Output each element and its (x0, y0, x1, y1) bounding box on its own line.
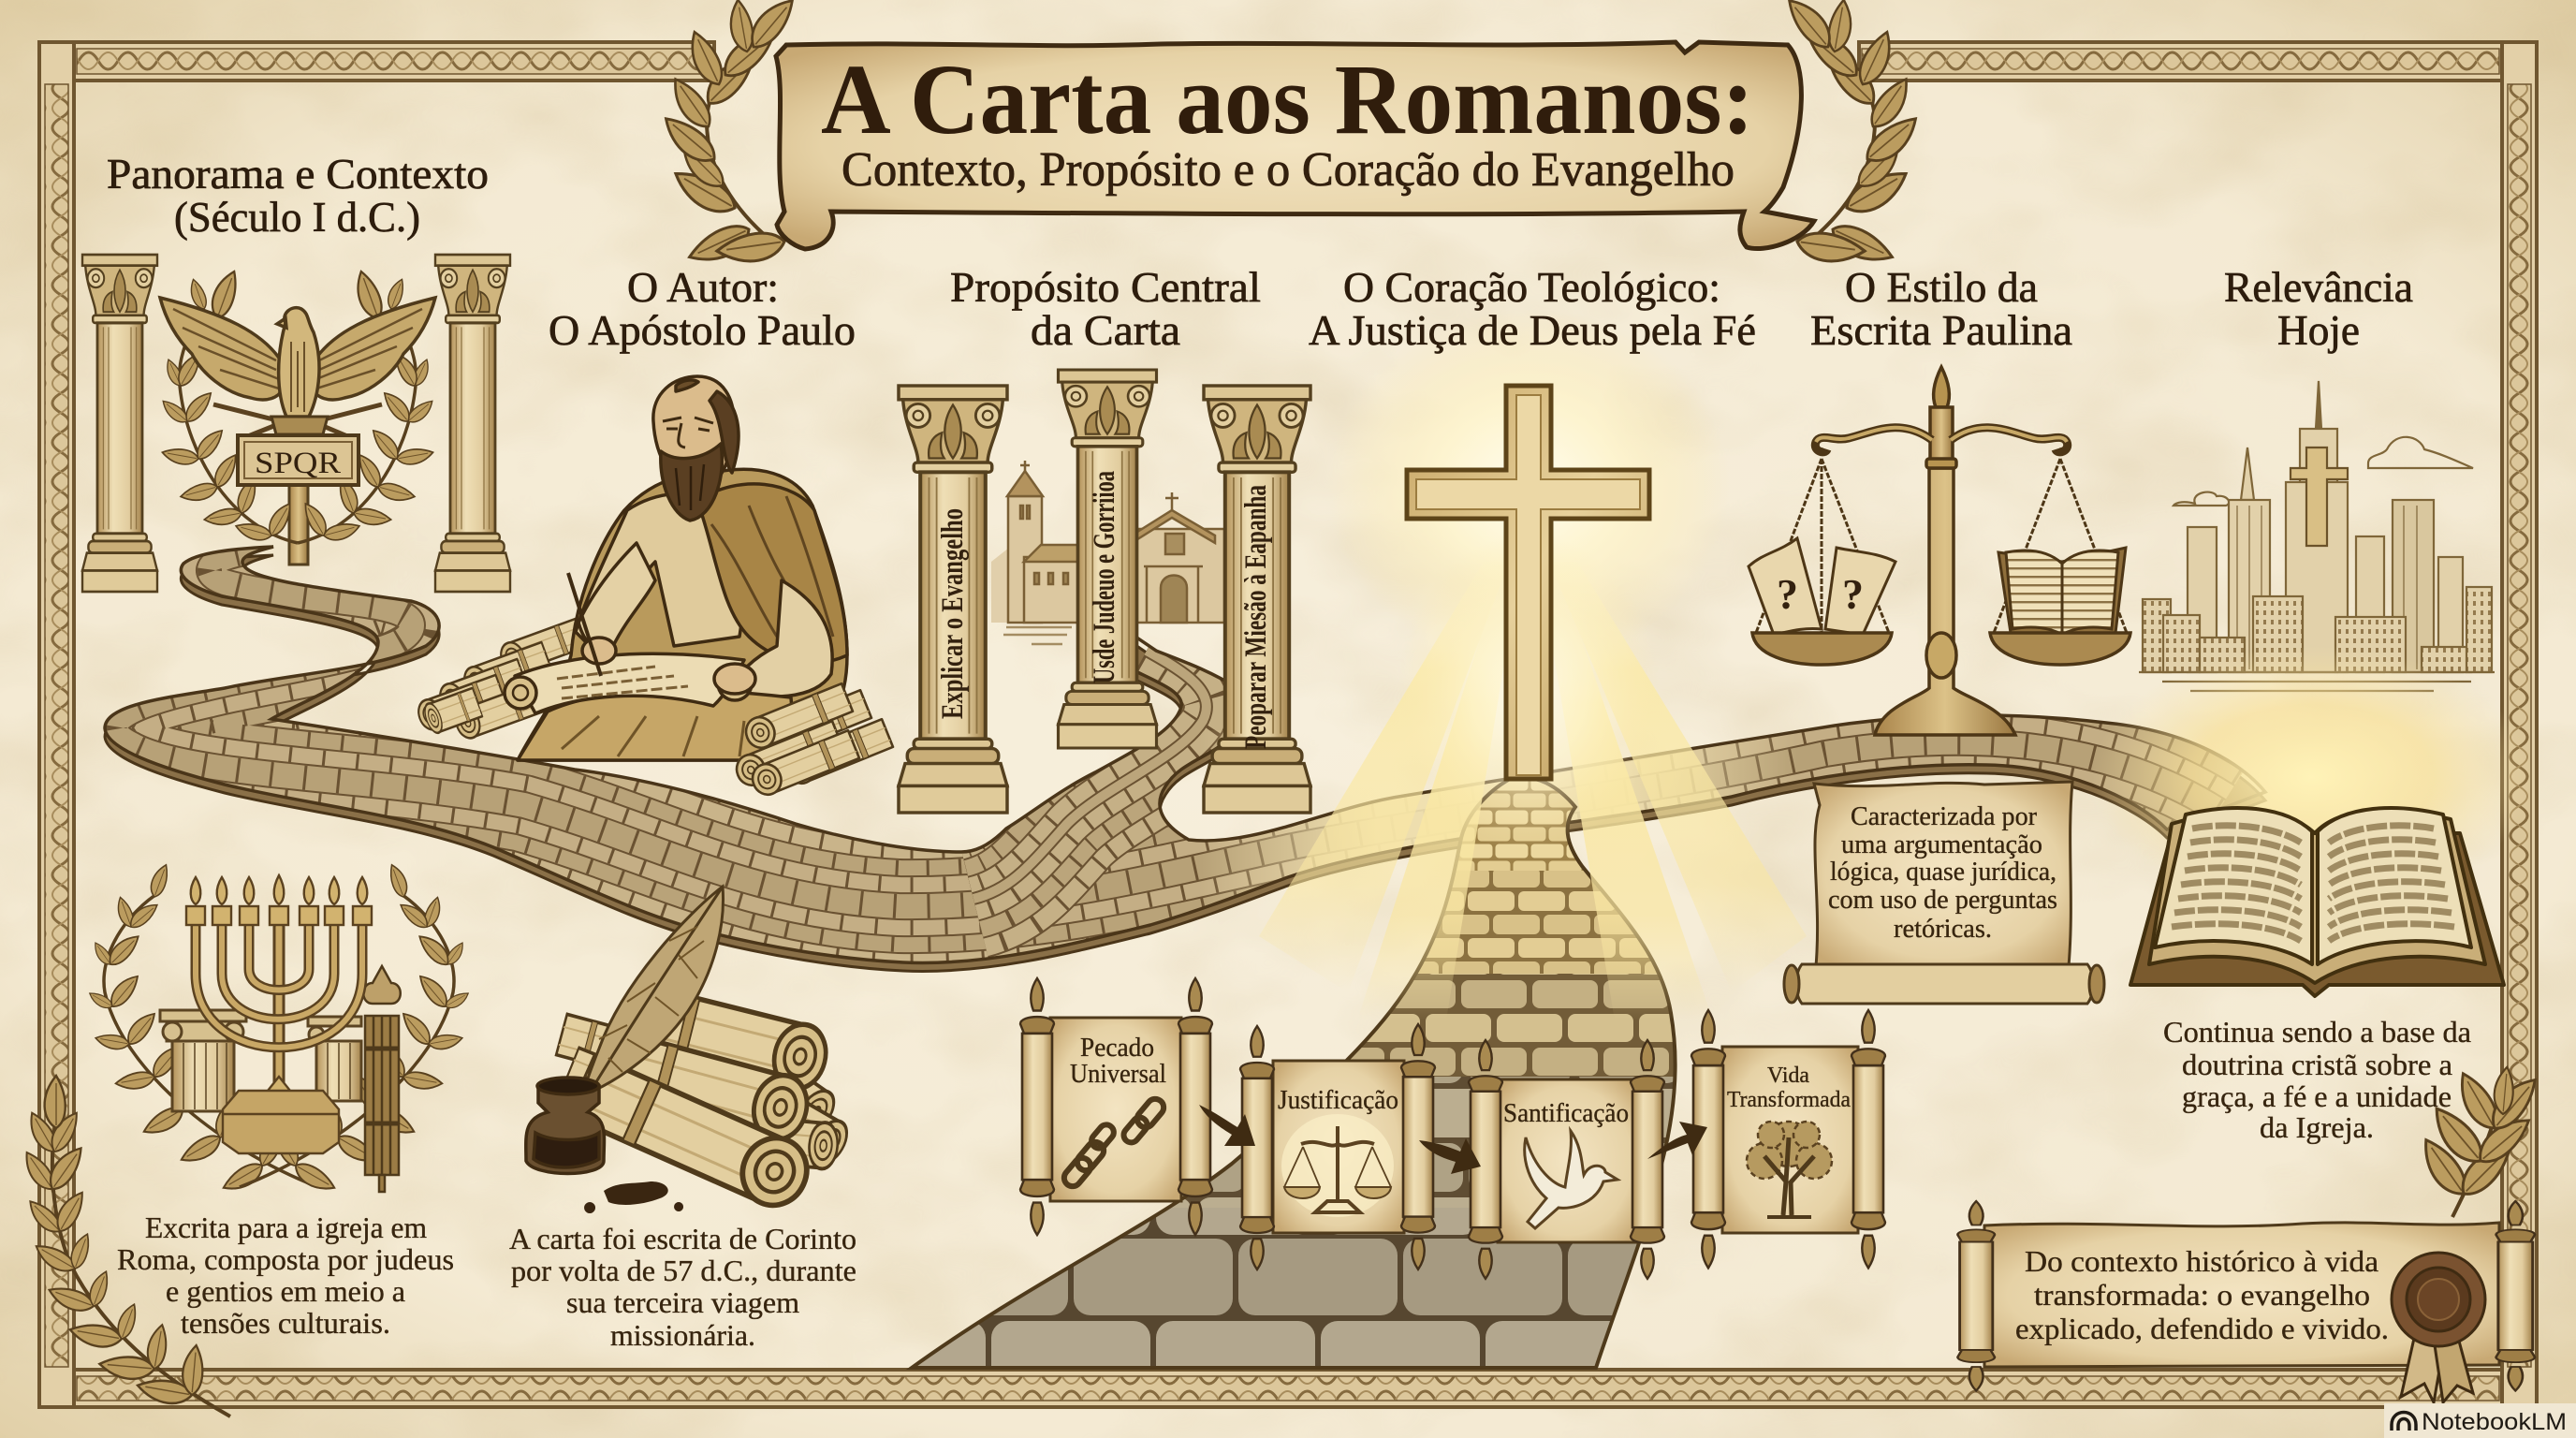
heading: panorama (107, 151, 489, 241)
scroll: style description: lógica, quase jurídica, (1830, 858, 2056, 887)
notebooklm badge: NotebookLM (2422, 1409, 2567, 1435)
plaque SPQR: SPQR (255, 447, 341, 480)
doctrine steps (1020, 978, 1885, 1279)
pillar 1: explain the gospel (899, 386, 1007, 813)
plaque SPQR (238, 435, 359, 485)
icon: open bible (2130, 808, 2504, 996)
arrow 1 (1199, 1105, 1255, 1146)
scroll: style description (1784, 782, 2104, 1004)
title laurel left (657, 0, 800, 271)
heading: style: Escrita Paulina (1810, 307, 2072, 354)
icon: menorah wreath (87, 862, 471, 1196)
icon: balance scales (1749, 367, 2130, 735)
heading: style (1810, 264, 2072, 354)
pillar 2: unite jews and gentiles (1058, 370, 1157, 748)
heading: heart: O Coração Teológico: (1343, 264, 1720, 311)
text: written from Corinth: A carta foi escrita de Corinto (509, 1222, 856, 1255)
pillar 2: unite jews and gentiles: Usde Judeuo e Gorriioa (1088, 471, 1121, 683)
closing scroll: transformada: o evangelho (2034, 1278, 2370, 1312)
icon: dove (1525, 1131, 1617, 1228)
subtitle text: Contexto, Propósito e o Coração do Evangelho (842, 143, 1734, 197)
heading: author: O Autor: (627, 264, 779, 311)
icon: tree (1747, 1122, 1832, 1217)
section: author (415, 264, 893, 1352)
lap scroll (515, 653, 744, 713)
scroll pile right (732, 683, 893, 799)
papers with question marks: ? (1842, 570, 1864, 618)
closing scroll (1957, 1201, 2535, 1402)
glow behind book (2092, 646, 2532, 908)
heading: relevance: Hoje (2277, 307, 2360, 354)
icon: wax seal (2392, 1253, 2485, 1402)
step: justification (1240, 1024, 1435, 1269)
pillar 3: prepare mission to Spain: Peoparar Miesão à Eapanha (1239, 485, 1273, 749)
heading: panorama: (Século I d.C.) (174, 194, 420, 241)
eagle wings (160, 298, 283, 400)
icon: small scale (1281, 1114, 1394, 1217)
text: relevance: Continua sendo a base da (2163, 1015, 2471, 1049)
section: relevance today (2092, 264, 2532, 1144)
pillar 1: explain the gospel: Explicar o Evangelho (936, 508, 970, 719)
pillar 3: prepare mission to Spain (1204, 386, 1310, 813)
text: relevance (2163, 1015, 2471, 1144)
heading: purpose: Propósito Central (950, 264, 1261, 311)
icon: roman eagle standard (158, 268, 437, 565)
heading: purpose: da Carta (1031, 307, 1180, 354)
arrow 2 (1419, 1138, 1481, 1174)
step: sanctification (1469, 1040, 1664, 1279)
feather (571, 887, 724, 1123)
light rays from the cross (1259, 309, 1807, 1020)
text: recipients: Excrita para a igreja em (145, 1211, 427, 1244)
scroll: style description: com uso de perguntas (1828, 886, 2057, 915)
heading: heart (1309, 264, 1756, 354)
text: written from Corinth (509, 1222, 856, 1352)
text: written from Corinth: sua terceira viagem (566, 1285, 799, 1319)
cross on skyline (2291, 448, 2348, 546)
illustration: modern skyline (2139, 381, 2495, 691)
section: panorama and context (82, 151, 510, 1340)
fasces (363, 966, 401, 1192)
text: recipients: tensões culturais. (181, 1306, 390, 1340)
icon: cross (1407, 386, 1649, 779)
heading: style: O Estilo da (1845, 264, 2038, 311)
heading: relevance: Relevância (2224, 264, 2413, 311)
step: justification: Justificação (1278, 1086, 1398, 1115)
icon: right roman column (435, 255, 510, 592)
text: recipients: e gentios em meio a (166, 1274, 405, 1308)
menorah (196, 927, 362, 1086)
text: written from Corinth: missionária. (610, 1318, 755, 1352)
step: transformed life: Transformada (1727, 1088, 1851, 1112)
step: universal sin: Universal (1070, 1060, 1166, 1089)
step: transformed life: Vida (1767, 1064, 1809, 1088)
scroll: style description: retóricas. (1894, 915, 1992, 944)
step: sanctification: Santificação (1503, 1099, 1629, 1128)
section: paul's style (1749, 264, 2130, 1004)
text: relevance: graça, a fé e a unidade (2182, 1079, 2452, 1113)
face (653, 376, 734, 492)
text: relevance: da Igreja. (2260, 1110, 2374, 1144)
heading: author (549, 264, 856, 354)
banner scroll (776, 42, 1814, 249)
section: theological heart (1309, 264, 1756, 779)
title banner (657, 0, 1925, 271)
title laurel right (1781, 0, 1925, 271)
step: universal sin: Pecado (1080, 1034, 1154, 1063)
text: recipients (117, 1211, 454, 1340)
notebooklm badge (2384, 1403, 2576, 1438)
heading: heart: A Justiça de Deus pela Fé (1309, 307, 1756, 354)
papers with question marks: ? (1777, 570, 1798, 618)
illustration: churches (991, 461, 1224, 644)
laurel bottom right (2414, 1066, 2543, 1217)
arrow 3 (1647, 1122, 1707, 1159)
heading: panorama: Panorama e Contexto (107, 151, 489, 198)
icon: broken chain (1061, 1095, 1167, 1190)
text: relevance: doutrina cristã sobre a (2182, 1048, 2452, 1081)
closing scroll: Do contexto histórico à vida (2025, 1244, 2378, 1278)
heading: purpose (950, 264, 1261, 354)
columns behind menorah (160, 1010, 361, 1111)
laurel bottom left (19, 1076, 230, 1416)
scroll: style description: Caracterizada por (1851, 802, 2038, 831)
stone road (105, 547, 2265, 971)
section: central purpose (899, 264, 1310, 813)
scroll pile left (415, 617, 589, 741)
text: written from Corinth: por volta de 57 d.C., durante (511, 1254, 856, 1287)
book on scale (1998, 548, 2126, 637)
heading: author: O Apóstolo Paulo (549, 307, 856, 354)
text: recipients: Roma, composta por judeus (117, 1242, 454, 1276)
inkwell (526, 1078, 604, 1174)
closing scroll: explicado, defendido e vivido. (2015, 1312, 2389, 1345)
icon: left roman column (82, 255, 157, 592)
scroll: style description: uma argumentação (1841, 830, 2042, 859)
papers with question marks (1749, 538, 1895, 635)
title text: A Carta aos Romanos: (821, 45, 1754, 155)
step: universal sin (1020, 978, 1212, 1235)
icon: quill, inkwell and scrolls (526, 887, 854, 1215)
step: transformed life (1691, 1010, 1885, 1268)
ink blot (584, 1181, 683, 1213)
illustration: Paul writing (415, 376, 893, 799)
central road (906, 781, 1677, 1370)
heading: relevance (2224, 264, 2413, 354)
